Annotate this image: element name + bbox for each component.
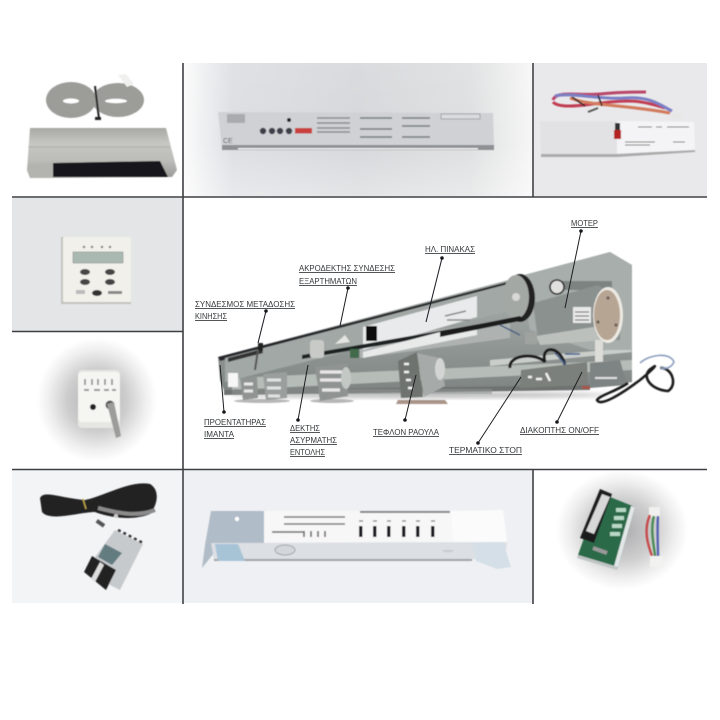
panel: LCD keypad bbox=[12, 198, 182, 331]
icon: teflon rollers bbox=[232, 352, 492, 404]
label: accessory terminal bbox=[299, 263, 395, 286]
panel: operator diagram bbox=[195, 218, 674, 457]
icon: keypad bbox=[61, 237, 131, 304]
label: wireless receiver: ΔΕΚΤΗΣ bbox=[290, 423, 320, 433]
label: transmission link bbox=[195, 299, 295, 321]
icon: control unit bar bbox=[218, 112, 494, 150]
panel: circuit board and connector bbox=[556, 470, 688, 590]
icon: small pulley and gearbox bbox=[560, 281, 612, 290]
panel: key switch bbox=[37, 338, 157, 462]
label: transmission link: ΣΥΝΔΕΣΜΟΣ ΜΕΤΑΔΟΣΗΣ bbox=[195, 299, 295, 309]
icon: black cable coil bbox=[40, 483, 157, 528]
icon: back plate bbox=[520, 252, 632, 350]
panel: power supply with coloured wires bbox=[534, 63, 707, 196]
label: belt tensioner bbox=[204, 417, 266, 439]
icon: circuit board bbox=[577, 489, 635, 570]
icon: receiver module bbox=[84, 530, 143, 590]
icon: wire connector bbox=[646, 507, 663, 567]
label: transmission link: ΚΙΝΗΣΗΣ bbox=[195, 311, 227, 321]
label: belt tensioner: ΠΡΟΕΝΤΑΤΗΡΑΣ bbox=[204, 417, 266, 427]
icon: sliding door operator assembly bbox=[218, 252, 674, 404]
label: wireless receiver: ΑΣΥΡΜΑΤΗΣ bbox=[290, 435, 337, 445]
callout lines bbox=[220, 230, 582, 444]
label: wireless receiver: ΕΝΤΟΛΗΣ bbox=[290, 447, 325, 457]
icon: power supply box bbox=[540, 121, 695, 157]
label: end stop: ΤΕΡΜΑΤΙΚΟ ΣΤΟΠ bbox=[449, 445, 522, 455]
panel: door sensor and cable bbox=[27, 74, 177, 178]
heading: part labels bbox=[195, 218, 599, 457]
label: accessory terminal: ΕΞΑΡΤΗΜΑΤΩΝ bbox=[299, 276, 357, 286]
label: wireless receiver bbox=[290, 423, 337, 457]
icon: idler post bbox=[595, 340, 603, 362]
icon: switch block bbox=[590, 360, 627, 388]
icon: power cable loop bbox=[597, 366, 673, 402]
icon: key selector bbox=[78, 370, 121, 438]
icon: flat cable coil bbox=[46, 74, 144, 120]
label: motor: ΜΟΤΕΡ bbox=[571, 218, 598, 228]
label: accessory terminal: ΑΚΡΟΔΕΚΤΗΣ ΣΥΝΔΕΣΗΣ bbox=[299, 263, 395, 273]
icon: motor bbox=[533, 285, 620, 340]
icon: wires bbox=[510, 350, 565, 368]
label: electrical panel: ΗΛ. ΠΙΝΑΚΑΣ bbox=[425, 244, 475, 254]
icon: drive pulley bbox=[505, 274, 535, 322]
icon: control unit bar: CE bbox=[223, 138, 233, 145]
label: on/off switch: ΔΙΑΚΟΠΤΗΣ ON/OFF bbox=[520, 425, 599, 435]
icon: bracket and module body bbox=[202, 510, 511, 569]
panel: cable and receiver bbox=[12, 470, 182, 603]
icon: end stop bbox=[520, 362, 588, 388]
icon: coloured wire bundle bbox=[553, 92, 682, 119]
panel: control unit on grey background bbox=[184, 63, 532, 196]
panel: switch module on bracket bbox=[184, 470, 532, 603]
icon: sensor housing bbox=[27, 128, 177, 178]
label: teflon roller: ΤΕΦΛΟΝ ΡΑΟΥΛΑ bbox=[373, 427, 439, 437]
label: belt tensioner: ΙΜΑΝΤΑ bbox=[204, 429, 234, 439]
